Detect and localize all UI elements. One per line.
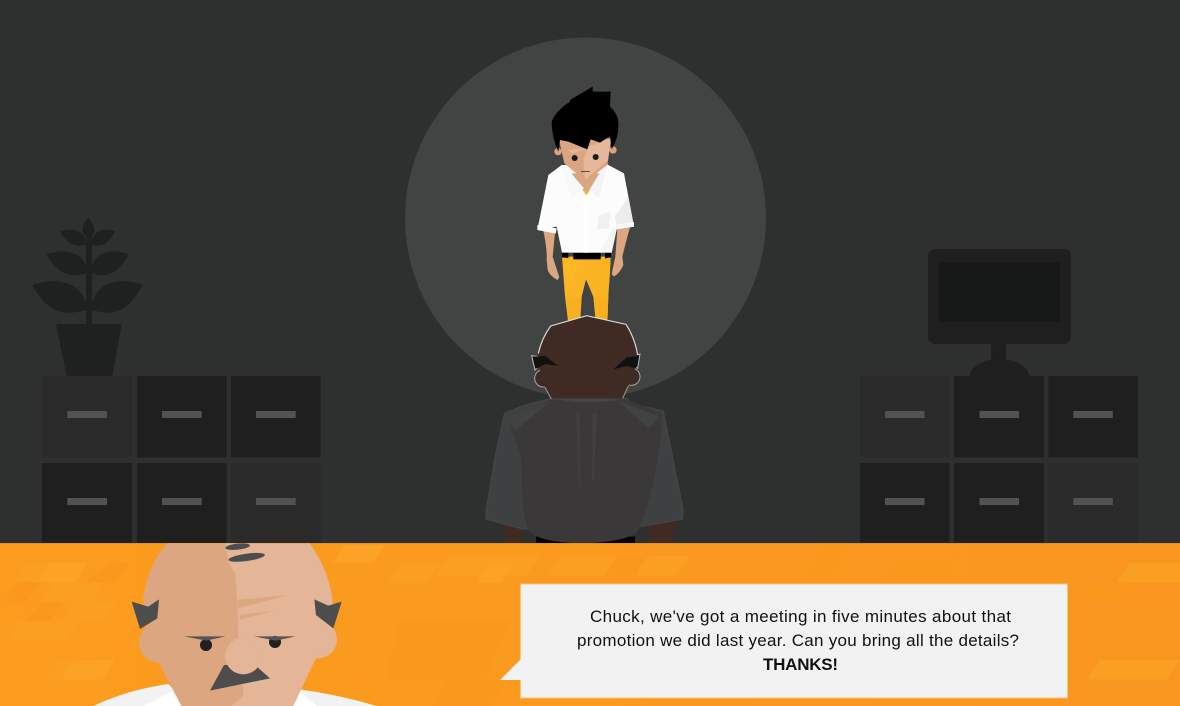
left filing cabinet <box>42 376 321 544</box>
face <box>554 138 617 181</box>
collar <box>561 163 608 197</box>
ears <box>139 628 337 662</box>
shirt <box>537 165 634 253</box>
nose <box>225 638 258 674</box>
top hair strands <box>225 543 265 562</box>
spotlight circle <box>405 38 766 398</box>
shirt collar <box>93 684 377 706</box>
forearms <box>503 520 677 543</box>
forehead wrinkles <box>237 595 288 619</box>
orange floor panel <box>0 543 1180 706</box>
bubble text: THANKS! <box>763 655 838 674</box>
neck <box>572 173 601 194</box>
moustache <box>210 665 270 691</box>
boss seen from behind <box>486 316 683 543</box>
decorative light facets <box>7 556 1180 680</box>
head <box>143 543 333 706</box>
icon: potted plant <box>32 217 143 376</box>
belt <box>536 537 635 543</box>
trousers <box>562 257 611 323</box>
hair <box>552 87 618 152</box>
bubble text <box>577 607 1019 674</box>
bubble text: promotion we did last year. Can you bring all the details? <box>577 631 1019 650</box>
icon: computer monitor <box>928 249 1071 377</box>
bubble text: Chuck, we've got a meeting in five minutes about that <box>590 607 1011 626</box>
speech bubble <box>500 584 1068 698</box>
eyes <box>184 636 296 651</box>
arms <box>543 227 630 280</box>
side hair <box>132 599 342 629</box>
head <box>532 316 640 399</box>
boss face close-up <box>93 542 377 706</box>
right filing cabinet <box>860 376 1138 544</box>
sleeves and shirt <box>486 390 683 543</box>
young employee Chuck <box>537 87 634 323</box>
belt <box>562 252 611 259</box>
